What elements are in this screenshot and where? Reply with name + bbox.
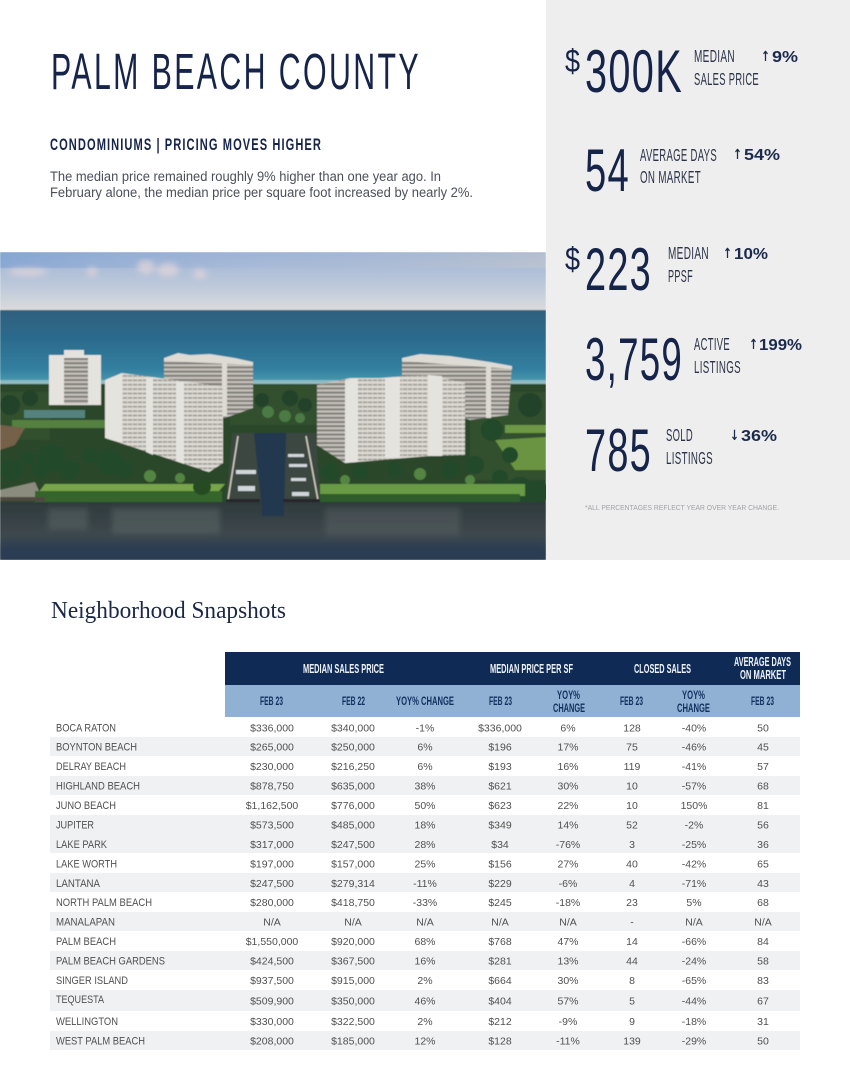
row: Highland Beach: HIGHLAND BEACH (56, 780, 140, 792)
row: Lake Worth: LAKE WORTH (56, 858, 117, 870)
row: Lantana: 43 (757, 878, 769, 890)
row: Wellington (56, 1016, 769, 1028)
table header: sub columns (225, 685, 800, 717)
row: Juno Beach: 150% (681, 800, 707, 812)
row: Palm Beach: 47% (557, 936, 579, 948)
stat: median sales price: 300K (585, 38, 683, 105)
row: Tequesta: -44% (682, 995, 706, 1007)
stat: median price per square foot: $ (565, 241, 580, 277)
stat: active listings: ↑ (749, 337, 758, 353)
row: Palm Beach Gardens: $424,500 (250, 956, 294, 968)
table header: sub columns: FEB 23 (489, 696, 512, 708)
building: far left tower (49, 350, 101, 405)
row: Boynton Beach: -46% (682, 742, 706, 754)
row: Boca Raton: $336,000 (478, 722, 522, 734)
row: Singer Island: 8 (629, 975, 635, 987)
table header: sub columns: FEB 23 (260, 696, 283, 708)
row: Lantana: 4 (629, 878, 635, 890)
row: Tequesta: 5 (629, 995, 635, 1007)
row: Lantana: LANTANA (56, 878, 101, 890)
row: Manalapan: MANALAPAN (56, 916, 115, 928)
row: Boynton Beach: $196 (488, 742, 512, 754)
stat: median sales price: $ (565, 43, 580, 79)
row: Lantana (56, 878, 769, 890)
row: Palm Beach Gardens: 44 (626, 956, 638, 968)
row: Boca Raton: $340,000 (331, 722, 375, 734)
row: Jupiter: JUPITER (56, 820, 94, 832)
row: Singer Island (56, 975, 769, 987)
table header: column groups: ON MARKET (740, 668, 786, 682)
row: Lake Park (56, 839, 769, 851)
row: Singer Island: 30% (557, 975, 579, 987)
row: Jupiter: -2% (685, 820, 703, 832)
row: Boynton Beach: $265,000 (250, 742, 294, 754)
table header: sub columns: FEB 23 (620, 696, 643, 708)
row: Boca Raton: -40% (682, 722, 706, 734)
stat: active listings: 3,759 (585, 326, 683, 393)
row: Delray Beach: $193 (488, 761, 512, 773)
row: Lantana: $229 (488, 878, 512, 890)
stat: active listings: LISTINGS (694, 357, 741, 377)
stat: sold listings: LISTINGS (666, 448, 713, 468)
row: Palm Beach: PALM BEACH (56, 936, 116, 948)
row: North Palm Beach: $280,000 (250, 897, 294, 909)
row: Wellington: $212 (488, 1016, 512, 1028)
row: Manalapan: N/A (263, 916, 281, 928)
body text (50, 169, 473, 200)
table header: sub columns: YOY% CHANGE (396, 696, 454, 708)
row: Manalapan (56, 916, 772, 928)
row: North Palm Beach: 23 (626, 897, 638, 909)
row: Singer Island: $664 (488, 975, 512, 987)
row: Delray Beach: 57 (757, 761, 769, 773)
canal and marina docks (226, 433, 320, 510)
row: Jupiter: 14% (557, 820, 579, 832)
row: Lake Worth: -42% (682, 858, 706, 870)
row: Wellington: 31 (757, 1016, 769, 1028)
row: Boynton Beach: 75 (626, 742, 638, 754)
row: Highland Beach: 10 (626, 780, 638, 792)
table header: column groups: AVERAGE DAYS (734, 655, 791, 669)
row: North Palm Beach: $418,750 (331, 897, 375, 909)
row: Highland Beach (56, 780, 769, 792)
stat: median price per square foot: ↑ (723, 246, 732, 262)
row: Palm Beach Gardens: -24% (682, 956, 706, 968)
row: Juno Beach: 50% (414, 800, 436, 812)
row: Lake Park: 28% (414, 839, 436, 851)
stat: median sales price (565, 38, 798, 105)
row: Boca Raton: 128 (623, 722, 641, 734)
table header: sub columns: YOY% (682, 690, 705, 702)
row: Boca Raton: BOCA RATON (56, 722, 116, 734)
greenery and lawns (0, 419, 549, 507)
row: Singer Island: 83 (757, 975, 769, 987)
stat: average days on market: 54 (585, 137, 630, 204)
row: Boynton Beach: BOYNTON BEACH (56, 742, 137, 754)
row: Delray Beach: 6% (417, 761, 433, 773)
row: Palm Beach: $920,000 (331, 936, 375, 948)
row: Palm Beach (56, 936, 769, 948)
row: Singer Island: $937,500 (250, 975, 294, 987)
row: Highland Beach: 68 (757, 780, 769, 792)
row: Lake Worth (56, 858, 769, 870)
row: Palm Beach: $1,550,000 (246, 936, 298, 948)
stat: median price per square foot: MEDIAN (668, 243, 709, 263)
row: Boca Raton: $336,000 (250, 722, 294, 734)
row: West Palm Beach: -29% (682, 1036, 706, 1048)
stat: sold listings: 36% (741, 428, 777, 445)
lagoon water (0, 502, 546, 560)
body text: The median price remained roughly 9% higher than one year ago. In (50, 169, 441, 184)
row: West Palm Beach: -11% (556, 1036, 580, 1048)
row: Lake Worth: 40 (626, 858, 638, 870)
building: front left tower (105, 373, 223, 472)
row: Lake Worth: $197,000 (250, 858, 294, 870)
row: Tequesta: 46% (414, 995, 436, 1007)
stat: sold listings: ↓ (730, 428, 739, 444)
row: Palm Beach: 14 (626, 936, 638, 948)
row: Palm Beach Gardens: 13% (557, 956, 579, 968)
row: Lantana: -11% (413, 878, 437, 890)
stat: median price per square foot: 10% (734, 246, 768, 263)
row: Wellington: 2% (417, 1016, 433, 1028)
row: Manalapan: N/A (754, 916, 772, 928)
row: North Palm Beach: 68 (757, 897, 769, 909)
row: Highland Beach: 38% (414, 780, 436, 792)
row: West Palm Beach: WEST PALM BEACH (56, 1036, 145, 1048)
row: Manalapan: N/A (559, 916, 577, 928)
row: Lantana: -6% (559, 878, 577, 890)
row: Highland Beach: $878,750 (250, 780, 294, 792)
row: West Palm Beach: 50 (757, 1036, 769, 1048)
row: Singer Island: -65% (682, 975, 706, 987)
row: Palm Beach: 84 (757, 936, 769, 948)
stat: active listings: ACTIVE (694, 334, 730, 354)
row: Palm Beach Gardens: PALM BEACH GARDENS (56, 956, 165, 968)
row: Manalapan: - (630, 916, 634, 928)
row: Delray Beach: $216,250 (331, 761, 375, 773)
row: West Palm Beach: $128 (488, 1036, 512, 1048)
row: Palm Beach Gardens: $367,500 (331, 956, 375, 968)
row: Juno Beach: $1,162,500 (246, 800, 298, 812)
photo: aerial view of condominium towers (0, 252, 549, 560)
row: Juno Beach: $776,000 (331, 800, 375, 812)
row: Wellington: -9% (559, 1016, 577, 1028)
row: Palm Beach Gardens: $281 (488, 956, 512, 968)
row: Lantana: $279,314 (331, 878, 375, 890)
row: Lake Park: LAKE PARK (56, 839, 108, 851)
row: Juno Beach: 22% (557, 800, 579, 812)
row: Wellington: WELLINGTON (56, 1016, 118, 1028)
table header: column groups: MEDIAN PRICE PER SF (490, 662, 573, 676)
stat: average days on market: AVERAGE DAYS (640, 145, 717, 165)
row: Tequesta: 67 (757, 995, 769, 1007)
stat: median price per square foot: PPSF (668, 266, 693, 286)
table header: sub columns: FEB 22 (342, 696, 365, 708)
building: centre rear tower (164, 353, 253, 418)
row: Juno Beach: JUNO BEACH (56, 800, 116, 812)
table header: sub columns: FEB 23 (751, 696, 774, 708)
row: Lantana: $247,500 (250, 878, 294, 890)
stat: median sales price: MEDIAN (694, 46, 735, 66)
row: Delray Beach: $230,000 (250, 761, 294, 773)
row: Jupiter: $573,500 (250, 820, 294, 832)
table header: column groups (225, 652, 800, 685)
stat: sold listings: 785 (585, 417, 652, 484)
row: Manalapan: N/A (685, 916, 703, 928)
row: Lake Park: -76% (556, 839, 580, 851)
row: Singer Island: 2% (417, 975, 433, 987)
row: North Palm Beach: 5% (686, 897, 702, 909)
row: Palm Beach: $768 (488, 936, 512, 948)
trees behind and between towers (0, 390, 542, 417)
row: Jupiter: 56 (757, 820, 769, 832)
row: Boynton Beach (56, 742, 769, 754)
row: Manalapan: N/A (491, 916, 509, 928)
row: Jupiter: 18% (414, 820, 436, 832)
row: Singer Island: $915,000 (331, 975, 375, 987)
table header: column groups: CLOSED SALES (634, 662, 691, 676)
table row stripes (50, 737, 800, 1050)
row: Tequesta: $404 (488, 995, 512, 1007)
title: PALM BEACH COUNTY (51, 43, 421, 100)
row: Lake Park: $317,000 (250, 839, 294, 851)
row: Delray Beach: 16% (557, 761, 579, 773)
row: Tequesta (56, 994, 769, 1007)
row: Highland Beach: $621 (488, 780, 512, 792)
row: Lake Park: $34 (491, 839, 509, 851)
row: Boynton Beach: $250,000 (331, 742, 375, 754)
stat: average days on market: 54% (744, 147, 780, 164)
row: Lake Park: 3 (629, 839, 635, 851)
row: Lake Worth: 25% (414, 858, 436, 870)
row: North Palm Beach: -18% (556, 897, 580, 909)
row: West Palm Beach (56, 1036, 769, 1048)
footnote: *ALL PERCENTAGES REFLECT YEAR OVER YEAR CHANGE. (585, 503, 779, 512)
row: Boca Raton: 50 (757, 722, 769, 734)
row: Lake Worth: $157,000 (331, 858, 375, 870)
stat: average days on market: ↑ (733, 147, 742, 163)
row: Boynton Beach: 6% (417, 742, 433, 754)
row: Jupiter (56, 820, 769, 832)
row: Tequesta: $509,900 (250, 995, 294, 1007)
row: Juno Beach (56, 800, 769, 812)
row: Highland Beach: -57% (682, 780, 706, 792)
row: North Palm Beach: -33% (413, 897, 437, 909)
stat: median price per square foot (565, 236, 768, 303)
stat: median sales price: 9% (772, 49, 798, 66)
row: Lake Park: 36 (757, 839, 769, 851)
row: Palm Beach Gardens: 16% (414, 956, 436, 968)
row: Delray Beach (56, 761, 769, 773)
row: West Palm Beach: 139 (623, 1036, 641, 1048)
row: Boca Raton: 6% (560, 722, 576, 734)
heading: neighborhood snapshots: Neighborhood Snapshots (51, 597, 286, 624)
row: Lake Worth: $156 (488, 858, 512, 870)
row: Jupiter: $349 (488, 820, 512, 832)
stat: average days on market (585, 137, 780, 204)
row: Palm Beach: -66% (682, 936, 706, 948)
row: Juno Beach: 81 (757, 800, 769, 812)
panel: key statistics (546, 0, 850, 560)
stat: median price per square foot: 223 (585, 236, 652, 303)
row: Wellington: 9 (629, 1016, 635, 1028)
stat: sold listings: SOLD (666, 425, 693, 445)
row: West Palm Beach: $208,000 (250, 1036, 294, 1048)
body text: February alone, the median price per square foot increased by nearly 2%. (50, 185, 473, 200)
row: Juno Beach: $623 (488, 800, 512, 812)
row: West Palm Beach: 12% (414, 1036, 436, 1048)
table header: sub columns: YOY% (557, 690, 580, 702)
building: front right tower (317, 375, 465, 463)
row: Jupiter: 52 (626, 820, 638, 832)
row: Lake Worth: 65 (757, 858, 769, 870)
row: Wellington: $322,500 (331, 1016, 375, 1028)
stat: median sales price: ↑ (761, 49, 770, 65)
table header: sub columns: CHANGE (553, 703, 585, 715)
row: Lantana: -71% (682, 878, 706, 890)
row: Lake Worth: 27% (557, 858, 579, 870)
row: Boca Raton: -1% (416, 722, 434, 734)
row: Palm Beach: 68% (414, 936, 436, 948)
row: West Palm Beach: $185,000 (331, 1036, 375, 1048)
row: Boca Raton (56, 722, 769, 734)
row: Lake Park: $247,500 (331, 839, 375, 851)
row: Palm Beach Gardens: 58 (757, 956, 769, 968)
row: Singer Island: SINGER ISLAND (56, 975, 128, 987)
row: Boynton Beach: 45 (757, 742, 769, 754)
stat: average days on market: ON MARKET (640, 167, 701, 187)
row: Highland Beach: 30% (557, 780, 579, 792)
row: Manalapan: N/A (344, 916, 362, 928)
stat: median sales price: SALES PRICE (694, 69, 759, 89)
row: Delray Beach: 119 (624, 761, 641, 773)
row: Juno Beach: 10 (626, 800, 638, 812)
row: North Palm Beach (56, 897, 769, 909)
row: Delray Beach: -41% (682, 761, 706, 773)
row: Tequesta: $350,000 (331, 995, 375, 1007)
row: North Palm Beach: $245 (488, 897, 512, 909)
stat: sold listings (585, 417, 777, 484)
row: North Palm Beach: NORTH PALM BEACH (56, 897, 152, 909)
row: Boynton Beach: 17% (557, 742, 579, 754)
row: Manalapan: N/A (416, 916, 434, 928)
row: Tequesta: 57% (557, 995, 579, 1007)
table: neighborhood data (50, 652, 800, 1050)
row: Highland Beach: $635,000 (331, 780, 375, 792)
stat: active listings: 199% (759, 337, 802, 354)
row: Wellington: $330,000 (250, 1016, 294, 1028)
row: Jupiter: $485,000 (331, 820, 375, 832)
subheading: CONDOMINIUMS | PRICING MOVES HIGHER (50, 136, 322, 154)
table header: column groups: MEDIAN SALES PRICE (303, 662, 384, 676)
row: Palm Beach Gardens (56, 956, 769, 968)
row: Lake Park: -25% (682, 839, 706, 851)
building: right rear tower (402, 354, 512, 420)
row: Tequesta: TEQUESTA (56, 994, 105, 1006)
row: Wellington: -18% (682, 1016, 706, 1028)
row: Delray Beach: DELRAY BEACH (56, 761, 126, 773)
table header: sub columns: CHANGE (677, 703, 710, 715)
